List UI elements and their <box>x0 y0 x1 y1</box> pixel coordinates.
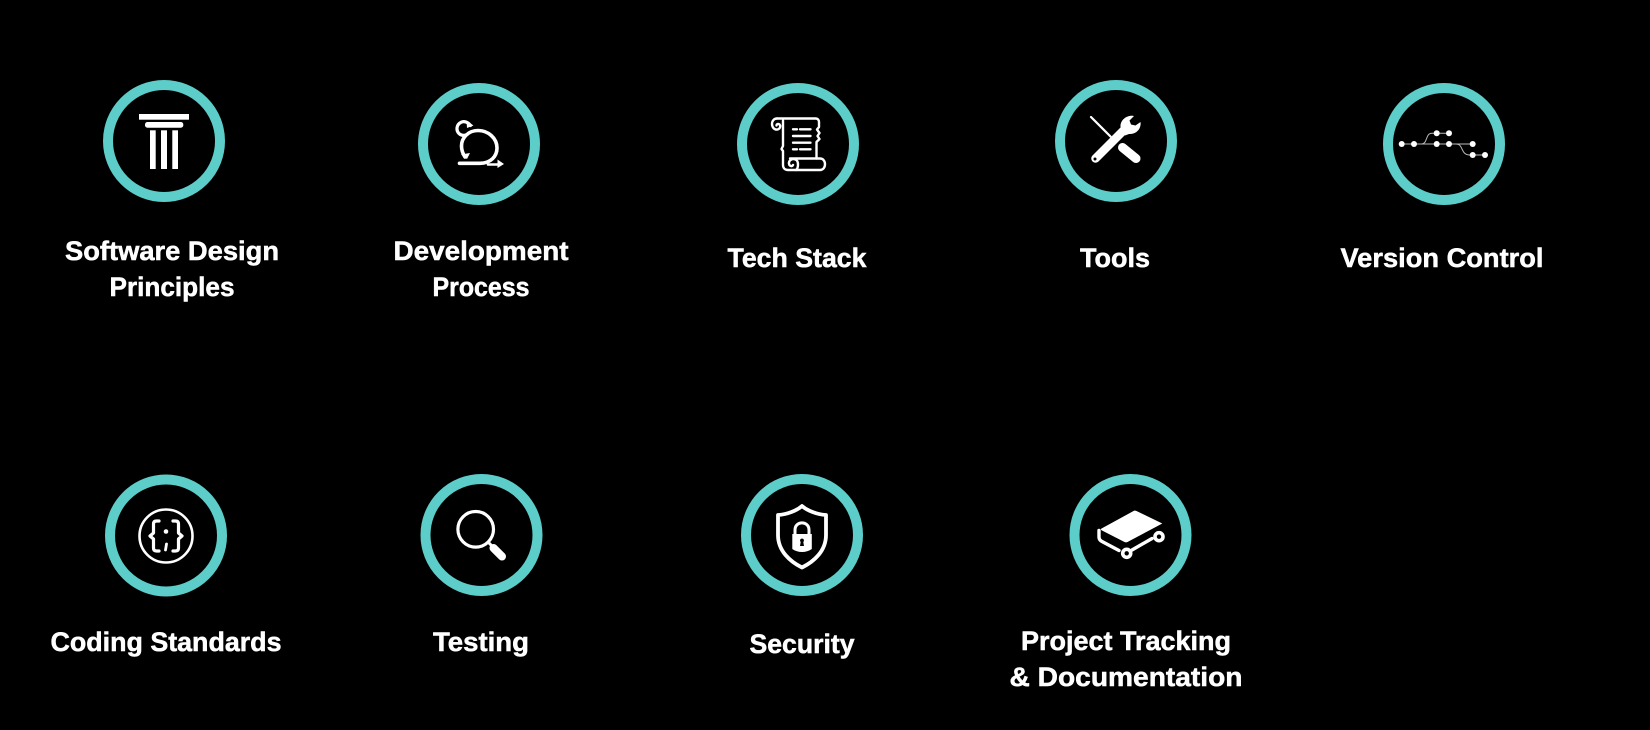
label: project tracking and documentation: Project Tracking <box>1021 626 1231 656</box>
label: project tracking and documentation <box>1010 626 1242 692</box>
panel: version control <box>1340 88 1544 273</box>
label: testing: Testing <box>433 627 529 657</box>
icon: iterative loop arrow <box>457 120 504 168</box>
ring: tech stack <box>742 88 854 200</box>
icon: magnifying glass <box>458 512 502 556</box>
ring: coding standards <box>110 480 222 592</box>
panel: tools <box>1060 85 1172 273</box>
label: coding standards: Coding Standards <box>50 627 282 657</box>
label: development process: Development <box>394 236 569 266</box>
label: version control: Version Control <box>1340 243 1544 273</box>
ring: version control <box>1388 88 1500 200</box>
panel: testing <box>426 479 538 657</box>
ring: software design principles <box>108 85 220 197</box>
icon: code braces in circle <box>140 510 192 562</box>
ring: testing <box>426 479 538 591</box>
icon: crossed wrench and screwdriver <box>1091 116 1141 160</box>
icon: greek column <box>139 114 189 169</box>
ring: development process <box>423 88 535 200</box>
label: tools: Tools <box>1080 243 1150 273</box>
ring: tools <box>1060 85 1172 197</box>
label: software design principles <box>65 236 279 302</box>
panel: development process <box>394 88 569 302</box>
label: software design principles: Software Design <box>65 236 279 266</box>
icon: book with nodes <box>1099 511 1163 557</box>
ring: project tracking and documentation <box>1074 479 1186 591</box>
icon: shield with padlock <box>778 506 826 568</box>
label: security: Security <box>750 629 854 659</box>
label: project tracking and documentation: & Documentation <box>1010 662 1242 692</box>
icon: paper scroll <box>772 118 825 170</box>
ring: security <box>746 479 858 591</box>
panel: software design principles <box>65 85 279 302</box>
panel: tech stack <box>728 88 867 273</box>
label: development process <box>394 236 569 302</box>
panel: coding standards <box>50 480 282 657</box>
panel: security <box>746 479 858 659</box>
label: tech stack: Tech Stack <box>728 243 867 273</box>
label: development process: Process <box>432 272 530 302</box>
panel: project tracking and documentation <box>1010 479 1242 692</box>
icon: git branch graph <box>1399 130 1488 158</box>
label: software design principles: Principles <box>110 272 234 302</box>
